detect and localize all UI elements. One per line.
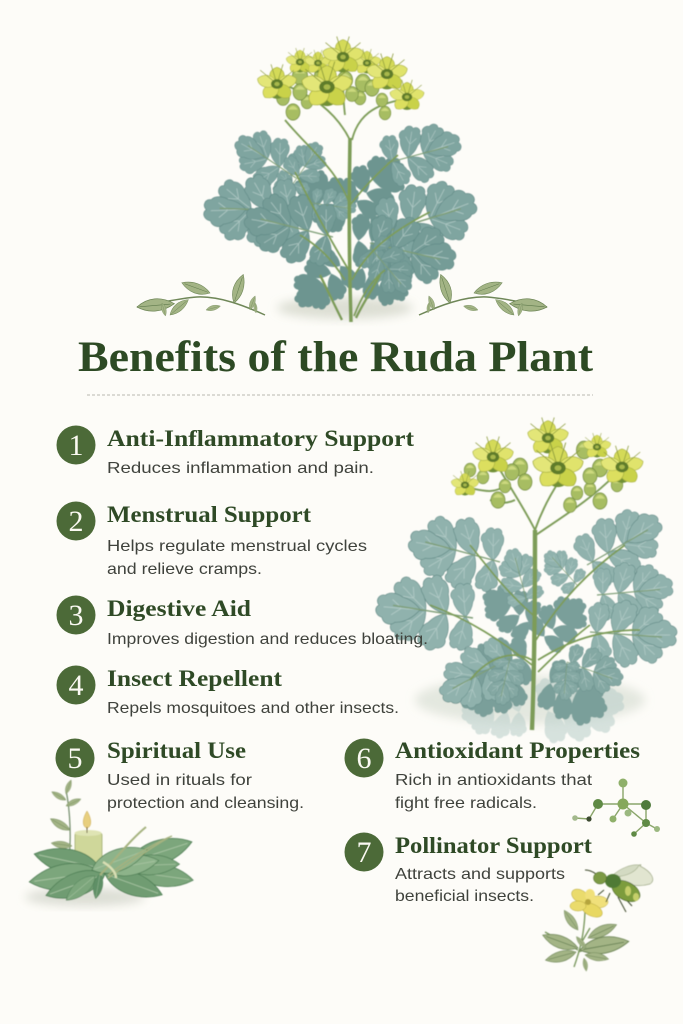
- candle: [75, 833, 102, 867]
- description 2: and relieve cramps.: [107, 561, 262, 578]
- flower plant: [541, 886, 630, 972]
- number badge 6: [344, 738, 384, 778]
- heading 7: Pollinator Support: [395, 833, 592, 858]
- description 3: Improves digestion and reduces bloating.: [107, 631, 428, 648]
- heading 5: Spiritual Use: [107, 738, 246, 763]
- number badge 1: 1: [68, 429, 84, 462]
- flower cluster: [255, 36, 426, 120]
- description 1: Reduces inflammation and pain.: [107, 460, 374, 477]
- decorative sprig right: [419, 273, 548, 318]
- title: Benefits of the Ruda Plant: [78, 334, 594, 381]
- icon: candle and herb bundle: [25, 779, 196, 907]
- number badge 4: 4: [68, 669, 84, 702]
- description 6: Rich in antioxidants that: [395, 772, 593, 789]
- number badge 5: 5: [68, 742, 82, 775]
- item 2: menstrual support: [56, 502, 367, 578]
- decorative sprig left: [136, 273, 265, 318]
- sprig: [66, 790, 70, 868]
- icon: molecule: [572, 778, 660, 837]
- leaves: [203, 111, 488, 272]
- stems: [430, 470, 640, 730]
- description 2: Helps regulate menstrual cycles: [107, 538, 367, 555]
- ground wash: [277, 297, 413, 319]
- heading 1: Anti-Inflammatory Support: [107, 426, 414, 451]
- number badge 4: [56, 666, 96, 704]
- back foliage: [462, 664, 628, 749]
- number badge 3: 3: [68, 599, 84, 632]
- description 4: Repels mosquitoes and other insects.: [107, 700, 399, 717]
- number badge 2: 2: [68, 505, 84, 538]
- flower cluster: [450, 418, 645, 512]
- leaves: [370, 490, 679, 725]
- herb bundle: [28, 830, 196, 907]
- item 3: digestive aid: [56, 596, 428, 648]
- number badge 7: 7: [356, 836, 372, 869]
- number badge 7: [344, 832, 384, 872]
- icon: bee and yellow flower: [541, 865, 653, 972]
- item 5: spiritual use: [56, 738, 304, 812]
- description 6: [395, 772, 593, 812]
- number badge 1: [56, 426, 96, 464]
- item 1: anti-inflammatory support: [56, 426, 414, 477]
- description 7: Attracts and supports: [395, 866, 565, 883]
- description 5: [107, 772, 304, 812]
- ground wash: [415, 676, 645, 724]
- heading 6: Antioxidant Properties: [395, 738, 640, 763]
- number badge 2: [56, 502, 96, 540]
- illustration: top ruda plant: [203, 36, 488, 326]
- description 5: protection and cleansing.: [107, 795, 304, 812]
- bee: [585, 865, 653, 912]
- illustration: right ruda plant: [370, 418, 679, 749]
- number badge 6: 6: [356, 742, 372, 775]
- description 5: Used in rituals for: [107, 772, 253, 789]
- description 7: beneficial insects.: [395, 888, 534, 905]
- item 7: pollinator support: [344, 832, 592, 905]
- heading 3: Digestive Aid: [107, 596, 251, 621]
- item 4: insect repellent: [56, 666, 399, 717]
- heading 4: Insect Repellent: [107, 666, 282, 691]
- description 7: [395, 866, 565, 905]
- description 6: fight free radicals.: [395, 795, 537, 812]
- heading 2: Menstrual Support: [107, 502, 311, 527]
- description 2: [107, 538, 367, 578]
- number badge 3: [56, 596, 96, 634]
- number badge 5: [56, 738, 94, 778]
- stems: [285, 70, 430, 322]
- back foliage: [279, 139, 423, 326]
- item 6: antioxidant properties: [344, 738, 640, 812]
